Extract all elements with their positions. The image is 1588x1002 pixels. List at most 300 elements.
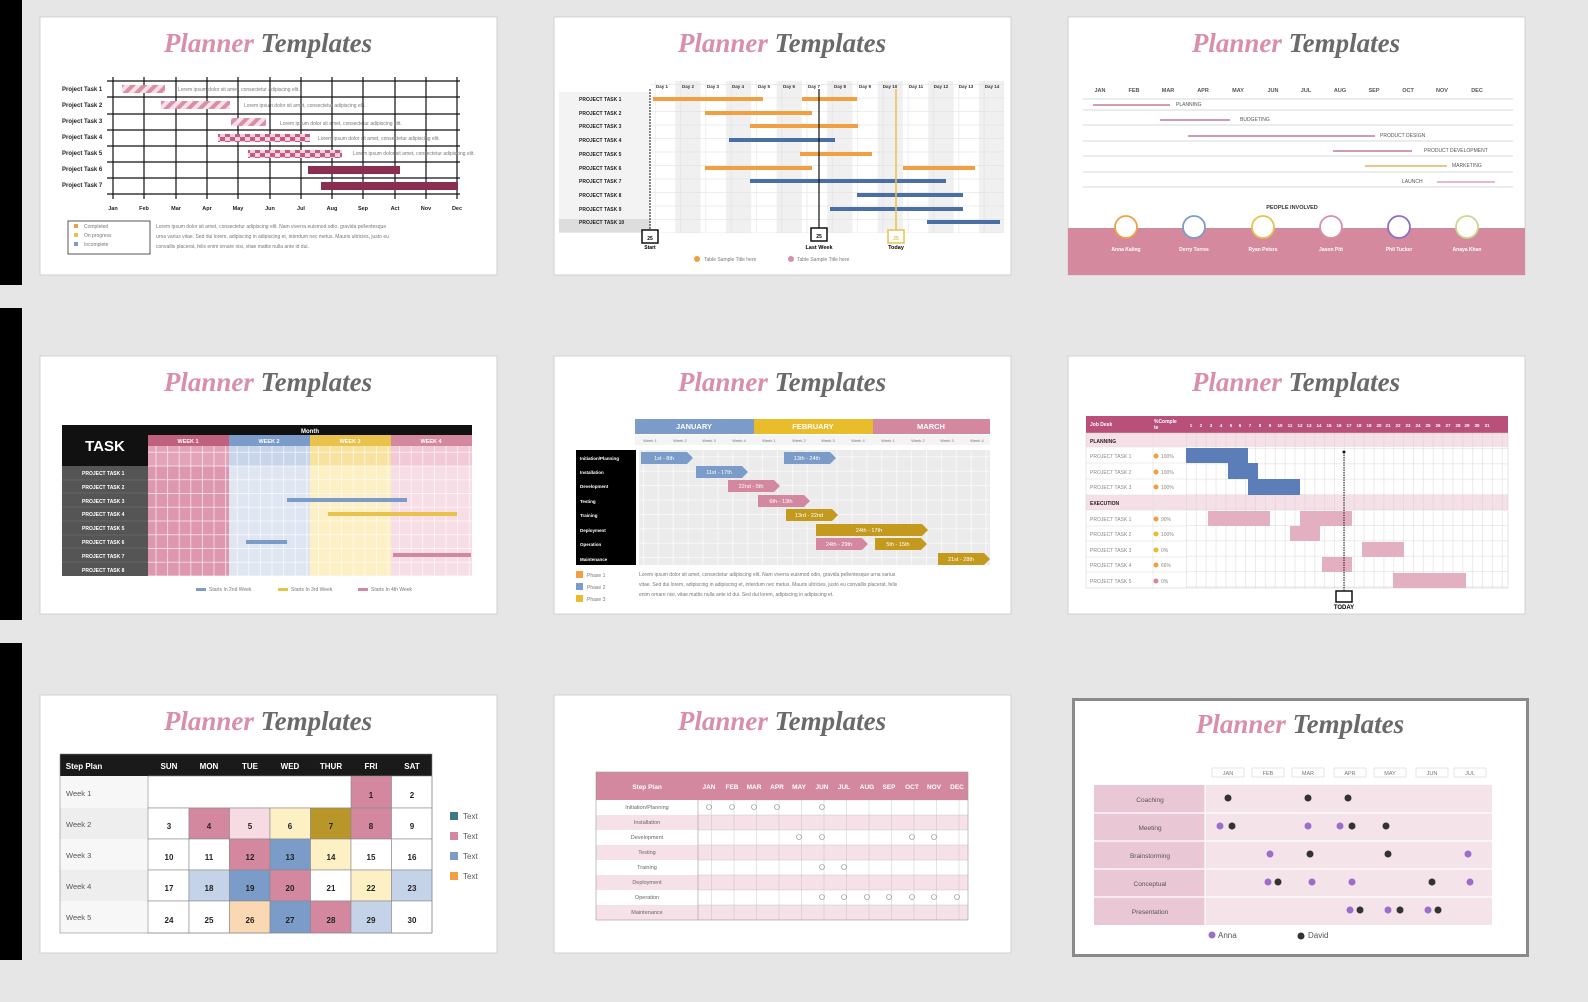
table: 100% bbox=[1161, 454, 1174, 460]
legend: Starts In 3rd Week bbox=[291, 587, 333, 593]
month axis: Sep bbox=[358, 206, 369, 212]
legend bbox=[694, 256, 849, 263]
legend: Starts In 4th Week bbox=[371, 587, 413, 593]
calendar table: 28 bbox=[327, 916, 336, 925]
legend bbox=[196, 587, 413, 593]
table: Deployment bbox=[632, 880, 662, 886]
schedule grid: Presentation bbox=[1132, 909, 1169, 916]
calendar table: 12 bbox=[246, 853, 255, 862]
day header: Day 7 bbox=[808, 84, 820, 89]
calendar table: SUN bbox=[161, 762, 178, 771]
legend bbox=[1208, 931, 1328, 940]
panel: slide 1 gantt months bbox=[40, 17, 497, 275]
calendar table: 4 bbox=[207, 822, 212, 831]
calendar icons: Today bbox=[888, 245, 905, 251]
months: JUN bbox=[1267, 88, 1279, 94]
chevrons: 13th - 24th bbox=[794, 456, 820, 462]
row labels bbox=[579, 97, 624, 226]
table: 24 bbox=[1415, 423, 1421, 428]
chevrons: 11st - 17th bbox=[706, 470, 732, 476]
table: 11 bbox=[1288, 423, 1293, 428]
legend: Completed bbox=[84, 224, 108, 230]
day header: Day 4 bbox=[732, 84, 744, 89]
table: PROJECT TASK 4 bbox=[1090, 563, 1132, 569]
calendar table: 23 bbox=[408, 884, 417, 893]
table: PROJECT TASK 3 bbox=[1090, 485, 1132, 491]
table: AUG bbox=[860, 784, 874, 791]
calendar table: 9 bbox=[410, 822, 415, 831]
table: PROJECT TASK 5 bbox=[82, 526, 125, 532]
day header: Day 10 bbox=[883, 84, 898, 89]
calendar table: 30 bbox=[408, 916, 417, 925]
chevrons: 22nd - 5th bbox=[739, 484, 763, 490]
calendar table: Step Plan bbox=[66, 762, 102, 771]
legend: Text bbox=[463, 872, 478, 881]
table: Step Plan bbox=[632, 784, 662, 791]
left black strips bbox=[0, 0, 22, 960]
day header: Day 14 bbox=[985, 84, 1000, 89]
calendar table: 11 bbox=[205, 853, 214, 862]
chevrons: 21st - 28th bbox=[948, 557, 974, 563]
paragraph bbox=[156, 224, 389, 250]
grid: Testing bbox=[580, 499, 596, 504]
calendar icons bbox=[642, 228, 905, 251]
paragraph: Lorem ipsum dolor sit amet, consectetur adipiscing elit. Nam viverra euismod odio, gravida pellentesque urna varius bbox=[639, 572, 896, 578]
table: Testing bbox=[638, 850, 656, 856]
month axis: Apr bbox=[202, 206, 213, 212]
table: WEEK 1 bbox=[177, 439, 199, 445]
table: 25 bbox=[1425, 423, 1431, 428]
calendar table: 20 bbox=[286, 884, 295, 893]
calendar table: 5 bbox=[248, 822, 253, 831]
schedule grid: Meeting bbox=[1138, 825, 1162, 832]
schedule grid: Brainstorming bbox=[1130, 853, 1170, 860]
table: 21 bbox=[1385, 423, 1391, 428]
panel: slide 2 daily gantt bbox=[554, 17, 1011, 275]
table: NOV bbox=[927, 784, 942, 791]
table: PROJECT TASK 1 bbox=[82, 471, 125, 477]
pink band with people: Anaya Khan bbox=[1453, 247, 1481, 253]
table: TASK bbox=[85, 438, 125, 455]
pink band with people: Anna Kaling bbox=[1111, 247, 1141, 253]
table: 30 bbox=[1474, 423, 1480, 428]
table: JUL bbox=[838, 784, 850, 791]
grid: Operation bbox=[580, 542, 602, 547]
table: 15 bbox=[1326, 423, 1332, 428]
schedule grid: Coaching bbox=[1136, 797, 1164, 804]
calendar table: Week 5 bbox=[66, 913, 91, 922]
panel: slide 8 yearly step plan bbox=[554, 695, 1011, 953]
day header bbox=[656, 84, 1000, 89]
calendar table: 25 bbox=[205, 916, 214, 925]
table: 17 bbox=[1346, 423, 1352, 428]
paragraph bbox=[639, 572, 898, 598]
table: WEEK 4 bbox=[420, 439, 442, 445]
row labels: PROJECT TASK 8 bbox=[579, 193, 622, 199]
paragraph: Lorem ipsum dolor sit amet, consectetur adipiscing elit. Nam viverra euismod odio, gravida pellentesque bbox=[156, 224, 386, 230]
pins bbox=[1216, 794, 1474, 914]
bars bbox=[246, 498, 471, 557]
table: 90% bbox=[1161, 517, 1172, 523]
calendar icons: 25 bbox=[893, 236, 899, 242]
day header: Day 13 bbox=[959, 84, 974, 89]
month labels: JAN bbox=[1223, 771, 1233, 777]
bars: Lorem ipsum dolor sit amet, consectetur adipiscing elit. bbox=[178, 87, 300, 93]
panel: slide 5 quarterly chevron gantt bbox=[554, 356, 1011, 614]
calendar table: 21 bbox=[327, 884, 336, 893]
table: PROJECT TASK 1 bbox=[1090, 517, 1132, 523]
bars: Lorem ipsum dolor sit amet, consectetur adipiscing elit. bbox=[280, 121, 402, 127]
month labels: JUN bbox=[1427, 771, 1437, 777]
table: PROJECT TASK 6 bbox=[82, 540, 125, 546]
table: 100% bbox=[1161, 485, 1174, 491]
table: Installation bbox=[634, 820, 660, 826]
bars bbox=[122, 85, 475, 190]
table: 8 bbox=[1259, 423, 1262, 428]
calendar icons: Last Week bbox=[805, 245, 833, 251]
month header: Week 4 bbox=[970, 438, 985, 443]
legend: Table Sample Title here bbox=[704, 257, 756, 263]
table: 18 bbox=[1356, 423, 1362, 428]
table: PROJECT TASK 8 bbox=[82, 568, 125, 574]
table: 4 bbox=[1220, 423, 1223, 428]
calendar icons: 25 bbox=[647, 236, 653, 242]
legend: Anna bbox=[1218, 931, 1237, 940]
month header: FEBRUARY bbox=[792, 422, 834, 431]
month axis: Aug bbox=[327, 206, 337, 212]
table: 100% bbox=[1161, 470, 1174, 476]
table: 13 bbox=[1306, 423, 1312, 428]
month labels: JUL bbox=[1465, 771, 1475, 777]
month axis: Mar bbox=[171, 206, 182, 212]
title: Planner Templates bbox=[677, 367, 886, 397]
table: 28 bbox=[1455, 423, 1461, 428]
panel: slide 3 timeline with people: PRODUCT DEVELOPMENT bbox=[1424, 148, 1488, 154]
table: 23 bbox=[1405, 423, 1411, 428]
calendar table: 14 bbox=[327, 853, 336, 862]
table: PROJECT TASK 3 bbox=[1090, 548, 1132, 554]
day header: Day 3 bbox=[707, 84, 719, 89]
calendar table: Week 2 bbox=[66, 820, 91, 829]
month labels: FEB bbox=[1263, 771, 1274, 777]
day header: Day 6 bbox=[783, 84, 795, 89]
table: Job Desk bbox=[1090, 422, 1112, 428]
month header: JANUARY bbox=[676, 422, 712, 431]
table: WEEK 3 bbox=[339, 439, 361, 445]
panel: slide 3 timeline with people: BUDGETING bbox=[1240, 117, 1270, 123]
table: Month bbox=[301, 429, 319, 435]
month header: Week 3 bbox=[940, 438, 955, 443]
months: JAN bbox=[1094, 88, 1106, 94]
calendar icons: Start bbox=[644, 245, 656, 251]
task labels: Project Task 6 bbox=[62, 167, 103, 173]
calendar table: Week 4 bbox=[66, 882, 91, 891]
calendar table: 7 bbox=[329, 822, 334, 831]
table: 2 bbox=[1200, 423, 1203, 428]
calendar table: 19 bbox=[246, 884, 255, 893]
bars: Lorem ipsum dolor sit amet, consectetur adipiscing elit. bbox=[318, 136, 440, 142]
table: MAY bbox=[792, 784, 807, 791]
table: Maintenance bbox=[631, 910, 663, 916]
table: PROJECT TASK 1 bbox=[1090, 454, 1132, 460]
chevrons: 6th - 13th bbox=[769, 499, 793, 505]
legend: Table Sample Title here bbox=[797, 257, 849, 263]
day header: Day 2 bbox=[682, 84, 694, 89]
table: 20 bbox=[1376, 423, 1382, 428]
legend: Incomplete bbox=[84, 242, 109, 248]
title: Planner Templates bbox=[163, 706, 372, 736]
calendar table: 2 bbox=[410, 791, 415, 800]
table: Operation bbox=[635, 895, 659, 901]
paragraph: enim ornare nisi, vitae mattis nulla ante id dui. Sed dui lorem, adipiscing in adipiscing et. bbox=[639, 592, 834, 598]
table: 27 bbox=[1445, 423, 1451, 428]
table bbox=[1086, 416, 1508, 588]
grid: Training bbox=[580, 513, 598, 518]
grid: Maintenance bbox=[580, 557, 608, 562]
table: 19 bbox=[1366, 423, 1372, 428]
task lines bbox=[1093, 105, 1495, 182]
table: 3 bbox=[1210, 423, 1213, 428]
month header bbox=[635, 419, 990, 445]
table: 22 bbox=[1395, 423, 1401, 428]
month axis: Nov bbox=[421, 206, 432, 212]
months: DEC bbox=[1471, 88, 1483, 94]
month axis: Jan bbox=[108, 206, 118, 212]
table: APR bbox=[770, 784, 784, 791]
row labels: PROJECT TASK 2 bbox=[579, 111, 622, 117]
row labels: PROJECT TASK 9 bbox=[579, 207, 622, 213]
day header: Day 8 bbox=[834, 84, 846, 89]
calendar table: 3 bbox=[167, 822, 172, 831]
month axis: Jul bbox=[297, 206, 305, 212]
table: OCT bbox=[905, 784, 919, 791]
month header: Week 3 bbox=[702, 438, 717, 443]
calendar table: 8 bbox=[369, 822, 374, 831]
month axis: Act bbox=[391, 206, 400, 212]
months: OCT bbox=[1402, 88, 1414, 94]
calendar table: 6 bbox=[288, 822, 293, 831]
month labels: APR bbox=[1344, 771, 1356, 777]
month header: Week 4 bbox=[851, 438, 866, 443]
chevrons: 24th - 29th bbox=[826, 542, 852, 548]
legend: Text bbox=[463, 812, 478, 821]
calendar table: 16 bbox=[408, 853, 417, 862]
chevrons: 5th - 15th bbox=[886, 542, 910, 548]
months bbox=[1094, 88, 1483, 94]
task labels: Project Task 1 bbox=[62, 87, 103, 93]
panel: slide 3 timeline with people: MARKETING bbox=[1452, 163, 1482, 169]
table: PROJECT TASK 7 bbox=[82, 554, 125, 560]
months: AUG bbox=[1334, 88, 1346, 94]
table: 0% bbox=[1161, 579, 1169, 585]
grid bbox=[576, 450, 990, 565]
row labels: PROJECT TASK 7 bbox=[579, 179, 622, 185]
title: Planner Templates bbox=[163, 367, 372, 397]
day header: Day 9 bbox=[859, 84, 871, 89]
pink band with people bbox=[1068, 216, 1525, 275]
grid: Installation bbox=[580, 470, 604, 475]
table: 66% bbox=[1161, 563, 1172, 569]
table: Training bbox=[637, 865, 657, 871]
panel: slide 6 monthly job desk bbox=[1068, 356, 1525, 614]
table: JUN bbox=[815, 784, 829, 791]
title: Planner Templates bbox=[163, 28, 372, 58]
schedule grid bbox=[1094, 785, 1492, 925]
month labels bbox=[1212, 768, 1486, 777]
months: FEB bbox=[1128, 88, 1140, 94]
month axis: May bbox=[233, 206, 244, 212]
calendar table: MON bbox=[200, 762, 219, 771]
table: 16 bbox=[1336, 423, 1342, 428]
calendar table: 10 bbox=[165, 853, 174, 862]
calendar table: WED bbox=[281, 762, 300, 771]
table: JAN bbox=[702, 784, 716, 791]
task labels: Project Task 7 bbox=[62, 183, 103, 189]
table: 100% bbox=[1161, 532, 1174, 538]
grid: Initiation/Planning bbox=[580, 456, 619, 461]
legend: Phase 3 bbox=[587, 597, 606, 603]
calendar table: THUR bbox=[320, 762, 342, 771]
months: MAR bbox=[1162, 88, 1174, 94]
calendar table: Week 1 bbox=[66, 789, 91, 798]
day header: Day 1 bbox=[656, 84, 668, 89]
table bbox=[62, 425, 472, 576]
panel: slide 9 team schedule bbox=[1074, 700, 1528, 956]
row labels: PROJECT TASK 10 bbox=[579, 220, 624, 226]
paragraph: urna varius vitae. Sed dui lorem, adipiscing in adipiscing et, interdum nec metus. Mauris ultricies, justo eu bbox=[156, 234, 389, 240]
table: PROJECT TASK 3 bbox=[82, 499, 125, 505]
table: 5 bbox=[1230, 423, 1233, 428]
calendar table: 13 bbox=[286, 853, 295, 862]
panel: slide 3 timeline with people: LAUNCH bbox=[1402, 179, 1423, 185]
schedule grid: Conceptual bbox=[1134, 881, 1167, 888]
pink band with people: Phil Tucker bbox=[1386, 247, 1412, 253]
month header: Week 2 bbox=[911, 438, 926, 443]
row labels: PROJECT TASK 3 bbox=[579, 124, 622, 130]
chevrons: 13rd - 22nd bbox=[795, 513, 823, 519]
panel: slide 4 weekly task table bbox=[40, 356, 497, 614]
month axis: Jun bbox=[265, 206, 276, 212]
table: Initiation/Planning bbox=[625, 805, 669, 811]
table: DEC bbox=[950, 784, 964, 791]
milestone lines bbox=[650, 89, 896, 230]
months: JUL bbox=[1301, 88, 1312, 94]
grid: Development bbox=[580, 484, 609, 489]
paragraph: vitae. Sed dui lorem, adipiscing in adipiscing et, interdum nec metus. Mauris ultricies, justo eu convallis placerat, felis bbox=[639, 582, 898, 588]
row labels: PROJECT TASK 4 bbox=[579, 138, 622, 144]
calendar table: 27 bbox=[286, 916, 295, 925]
calendar table bbox=[60, 754, 432, 933]
table: 26 bbox=[1435, 423, 1441, 428]
today marker: TODAY bbox=[1334, 605, 1354, 611]
calendar table: 24 bbox=[165, 916, 174, 925]
table: PROJECT TASK 2 bbox=[82, 485, 125, 491]
legend: Text bbox=[463, 832, 478, 841]
calendar table: 26 bbox=[246, 916, 255, 925]
title: Planner Templates bbox=[677, 28, 886, 58]
legend bbox=[68, 221, 150, 254]
calendar table: 17 bbox=[165, 884, 174, 893]
month labels: MAR bbox=[1302, 771, 1314, 777]
table: 6 bbox=[1239, 423, 1242, 428]
bars bbox=[1186, 448, 1466, 588]
row labels: PROJECT TASK 1 bbox=[579, 97, 622, 103]
pink band with people: Ryan Peters bbox=[1249, 247, 1278, 253]
legend: Starts In 2nd Week bbox=[209, 587, 252, 593]
task labels: Project Task 2 bbox=[62, 103, 103, 109]
table: te bbox=[1154, 425, 1159, 431]
month header: Week 1 bbox=[762, 438, 777, 443]
panel: slide 3 timeline with people: PLANNING bbox=[1176, 102, 1202, 108]
month header: Week 2 bbox=[673, 438, 688, 443]
legend bbox=[450, 812, 478, 881]
chevrons: 1st - 8th bbox=[654, 456, 674, 462]
table: PROJECT TASK 2 bbox=[1090, 532, 1132, 538]
table: 0% bbox=[1161, 548, 1169, 554]
calendar table: 18 bbox=[205, 884, 214, 893]
legend: Text bbox=[463, 852, 478, 861]
table: 7 bbox=[1249, 423, 1252, 428]
people heading: PEOPLE INVOLVED bbox=[1266, 205, 1318, 211]
month axis: Feb bbox=[139, 206, 150, 212]
calendar icons: 25 bbox=[816, 234, 822, 240]
month header: Week 2 bbox=[792, 438, 807, 443]
task labels: Project Task 3 bbox=[62, 119, 103, 125]
table: PROJECT TASK 2 bbox=[1090, 470, 1132, 476]
table: PROJECT TASK 5 bbox=[1090, 579, 1132, 585]
month header: Week 3 bbox=[821, 438, 836, 443]
calendar table: Week 3 bbox=[66, 851, 91, 860]
calendar table: TUE bbox=[242, 762, 259, 771]
legend: David bbox=[1308, 931, 1328, 940]
table: Development bbox=[631, 835, 664, 841]
row labels: PROJECT TASK 5 bbox=[579, 152, 622, 158]
task labels bbox=[62, 87, 103, 189]
title: Planner Templates bbox=[1191, 28, 1400, 58]
table: WEEK 2 bbox=[258, 439, 280, 445]
panel: slide 3 timeline with people: PRODUCT DESIGN bbox=[1380, 133, 1426, 139]
month header: Week 4 bbox=[732, 438, 747, 443]
legend: On progress bbox=[84, 233, 112, 239]
table: EXECUTION bbox=[1090, 501, 1120, 507]
table bbox=[596, 772, 968, 920]
chevrons: 24th - 17th bbox=[856, 528, 882, 534]
table: 9 bbox=[1269, 423, 1272, 428]
panel: slide 3 timeline with people bbox=[1068, 17, 1525, 275]
title: Planner Templates bbox=[1191, 367, 1400, 397]
month axis bbox=[108, 206, 462, 212]
legend: Phase 2 bbox=[587, 585, 606, 591]
today marker bbox=[1334, 450, 1354, 611]
months: SEP bbox=[1368, 88, 1380, 94]
bars: Lorem ipsum dolor sit amet, consectetur adipiscing elit. bbox=[353, 151, 475, 157]
calendar table: 1 bbox=[369, 791, 374, 800]
month labels: MAY bbox=[1384, 771, 1396, 777]
row labels: PROJECT TASK 6 bbox=[579, 166, 622, 172]
table: SEP bbox=[882, 784, 896, 791]
table: PROJECT TASK 4 bbox=[82, 512, 125, 518]
bars: Lorem ipsum dolor sit amet, consectetur adipiscing elit. bbox=[244, 103, 366, 109]
calendar table: 22 bbox=[367, 884, 376, 893]
table: 29 bbox=[1464, 423, 1470, 428]
table: 31 bbox=[1484, 423, 1490, 428]
table: 14 bbox=[1316, 423, 1322, 428]
day header: Day 5 bbox=[758, 84, 770, 89]
calendar table: 15 bbox=[367, 853, 376, 862]
legend bbox=[576, 571, 606, 603]
table: 10 bbox=[1277, 423, 1283, 428]
task labels: Project Task 4 bbox=[62, 135, 103, 141]
